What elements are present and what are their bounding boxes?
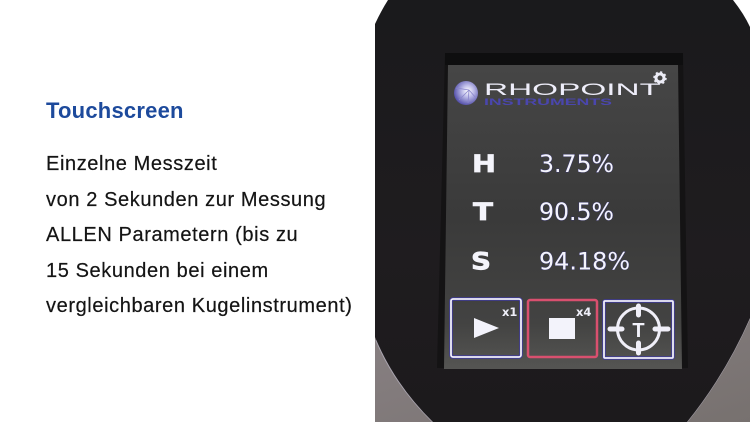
- button: play x1: x1: [502, 305, 517, 319]
- reading: T: [473, 198, 614, 226]
- logo subtitle: INSTRUMENTS: [484, 97, 612, 107]
- text line 5: vergleichbaren Kugelinstrument): [46, 295, 353, 317]
- reading: S: S: [471, 248, 491, 276]
- button: target T: T: [632, 320, 645, 342]
- button: stop x4: [528, 300, 597, 357]
- button: play x1: [451, 299, 521, 357]
- text line 2: von 2 Sekunden zur Messung: [46, 189, 326, 211]
- text panel: [46, 98, 353, 317]
- reading: T: T: [473, 198, 494, 226]
- text line 4: 15 Sekunden bei einem: [46, 260, 269, 282]
- text line 1: Einzelne Messzeit: [46, 153, 217, 175]
- device silver body: [375, 300, 750, 422]
- reading: H: 3.75%: [539, 150, 614, 178]
- icon: globe: [454, 81, 478, 105]
- reading: H: [472, 150, 614, 178]
- text line 3: ALLEN Parametern (bis zu: [46, 224, 298, 246]
- touchscreen display: [444, 65, 682, 369]
- device black face: [375, 0, 750, 422]
- logo: Rhopoint Instruments: [454, 72, 666, 107]
- reading: S: 94.18%: [539, 248, 630, 276]
- screen bezel: [437, 53, 688, 368]
- button: target T: [604, 301, 673, 358]
- reading: T: 90.5%: [539, 198, 614, 226]
- button: stop x4: x4: [576, 305, 591, 319]
- logo wordmark: RHOPOINT: [484, 80, 660, 99]
- reading: S: [471, 248, 630, 276]
- icon: settings gear: [654, 72, 666, 84]
- heading: Touchscreen: Touchscreen: [46, 98, 184, 123]
- reading: H: H: [472, 150, 496, 178]
